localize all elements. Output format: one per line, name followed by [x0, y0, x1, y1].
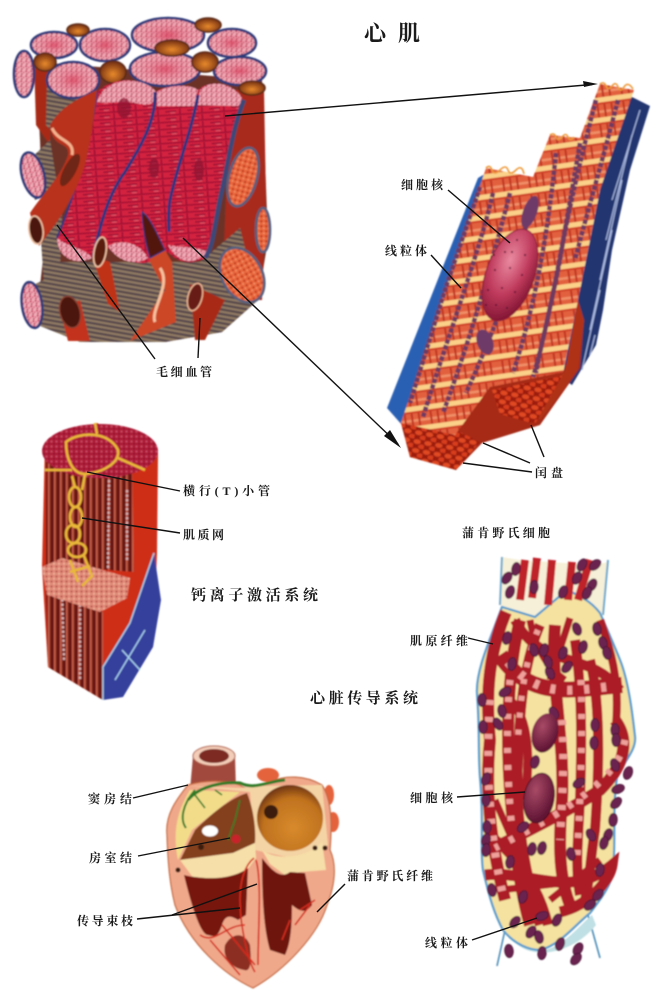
top section discs [14, 18, 266, 329]
illustration: single cardiac muscle cell [387, 83, 650, 470]
muscle face [57, 80, 243, 263]
septum and bundle branches [200, 858, 315, 975]
blue connective tissue [103, 553, 161, 700]
label: intercalated disc 闰盘: 闰盘 [535, 465, 563, 480]
title: 心肌 [364, 21, 420, 46]
illustration: cardiac muscle fibre bundle [14, 18, 273, 342]
label: sarcoplasmic reticulum 肌质网: 肌质网 [183, 527, 224, 542]
foramen [202, 826, 218, 836]
lower section step [42, 558, 130, 612]
cell striated surface [401, 84, 634, 435]
label: nucleus 细胞核 (Purkinje): 细胞核 [410, 790, 454, 805]
lower left chamber [224, 935, 251, 970]
left ventricle [184, 868, 248, 936]
cream valve walls [180, 842, 326, 880]
lower nucleus [520, 771, 558, 825]
label: Purkinje fibres 蒲肯野氏纤维: 蒲肯野氏纤维 [347, 868, 433, 883]
openings in atria [176, 805, 328, 872]
label: bundle branch 传导束枝: 传导束枝 [77, 913, 133, 928]
label: AV node 房室结: 房室结 [89, 850, 132, 865]
mitochondria chains [410, 100, 618, 417]
lower striated part [46, 590, 103, 700]
leader lines for heart [133, 785, 345, 919]
leader lines for cell [431, 190, 544, 472]
aorta lumen [199, 749, 229, 763]
wavy end edges [486, 83, 633, 174]
upper end edges [500, 557, 608, 615]
heading: cardiac conduction system: 心脏传导系统 [310, 689, 419, 707]
branching capillaries [27, 90, 225, 341]
myofibrils [485, 612, 623, 925]
illustration: heart conduction system [167, 746, 339, 988]
small vessel openings [34, 18, 265, 95]
connective fibres [582, 110, 640, 370]
cell outline [477, 590, 635, 950]
label: SA node 窦房结: 窦房结 [88, 791, 132, 806]
heading: calcium activation system: 钙离子激活系统 [191, 586, 319, 604]
right ventricle [262, 858, 312, 955]
left atrium [180, 793, 255, 860]
aorta [190, 756, 236, 790]
arrows and leader lines for top-left figure [57, 81, 598, 448]
upper nucleus [527, 710, 563, 756]
disc central blushes [36, 22, 260, 94]
lower end pale membrane [505, 915, 596, 953]
connective tissue: left band [387, 172, 488, 425]
aorta opening [193, 746, 235, 766]
illustration: Purkinje cell [477, 557, 635, 967]
blue tissue veins [103, 553, 154, 700]
second section stack [492, 376, 562, 424]
leader lines for Purkinje cell [457, 638, 537, 940]
label: mitochondrion 线粒体 (Purkinje): 线粒体 [425, 935, 468, 950]
cell nucleus [471, 222, 549, 328]
body base [36, 62, 268, 342]
cell side shadow [530, 300, 584, 420]
right side discs [211, 144, 273, 310]
front section stacks [401, 423, 480, 470]
sarcomere highlights [488, 630, 625, 895]
leader lines for calcium figure [82, 472, 180, 533]
upper end [500, 557, 608, 618]
fibre dividers [57, 92, 244, 258]
label: T tubule 横行(T)小管: 横行(T)小管 [183, 483, 270, 498]
dark muscle blotches [117, 98, 204, 181]
lower end edges [497, 915, 600, 966]
atrial rim [190, 785, 328, 860]
mitochondria columns [62, 480, 127, 680]
vessel stubs [257, 768, 339, 832]
back vessels and striated bundles [24, 60, 266, 342]
illustration: calcium activation system [42, 423, 161, 700]
label: myofibril 肌原纤维: 肌原纤维 [410, 633, 468, 648]
cell lower base [401, 320, 584, 470]
label: mitochondrion 线粒体: 线粒体 [385, 243, 427, 258]
sinoatrial node and internodal tract [183, 780, 285, 840]
atrioventricular node [232, 834, 240, 844]
fibre body [42, 423, 158, 700]
mitochondria [478, 557, 634, 967]
label: nucleus 细胞核: 细胞核 [401, 177, 444, 192]
heart silhouette [167, 777, 334, 988]
right atrium [257, 785, 323, 851]
mitochondria clusters [473, 194, 542, 357]
striated core [46, 460, 134, 572]
yellow atrial wall [176, 790, 240, 860]
T tubule and reticulum network [45, 423, 145, 586]
label: capillary 毛细血管: 毛细血管 [156, 364, 212, 379]
section disc [42, 424, 158, 478]
connective tissue: right [562, 92, 650, 385]
upper fibres [520, 558, 590, 605]
label: Purkinje cell 蒲肯野氏细胞: 蒲肯野氏细胞 [462, 525, 550, 540]
fibre caps [57, 81, 243, 262]
